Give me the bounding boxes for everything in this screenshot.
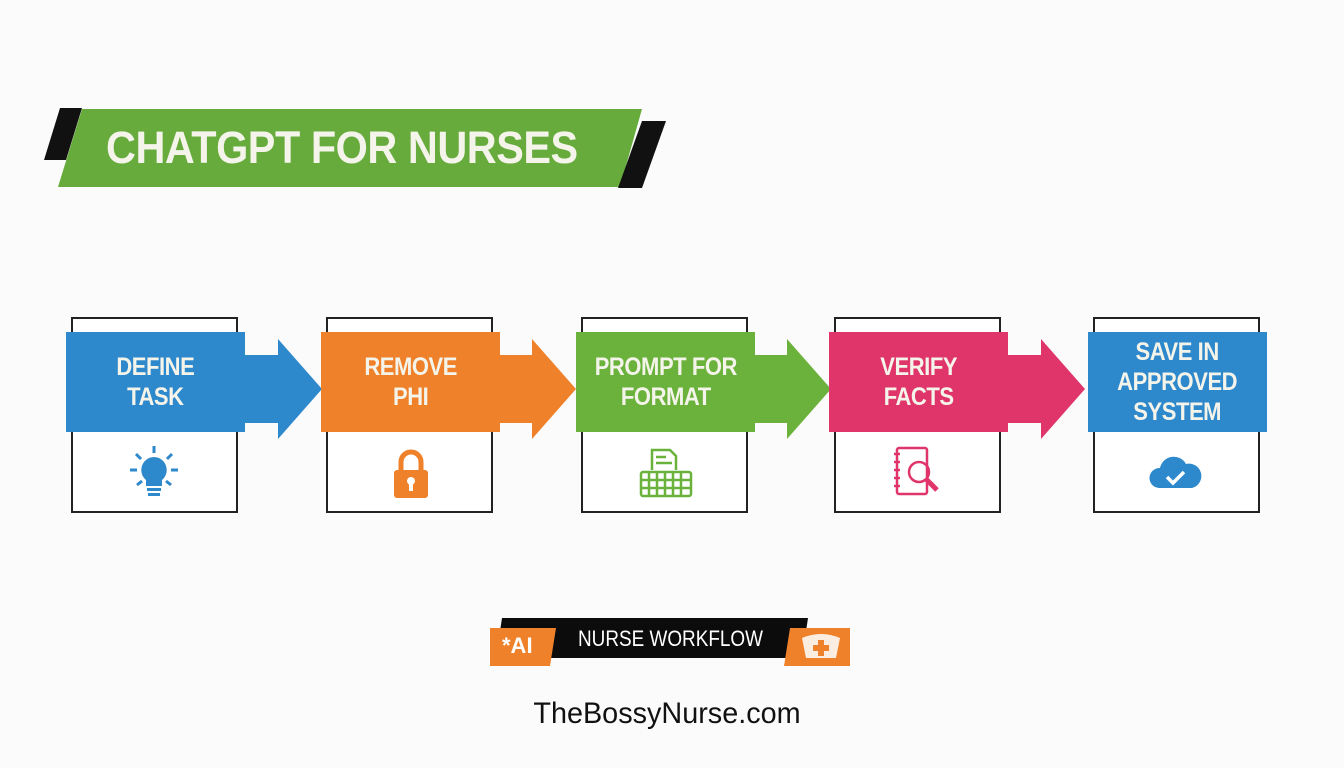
- step 5: save in approved system: SYSTEM: [1134, 398, 1221, 426]
- step 3: prompt for format: [576, 317, 829, 513]
- step 2: remove PHI: [321, 317, 576, 513]
- icon: lightbulb: [130, 446, 178, 496]
- step 2: remove PHI: PHI: [393, 383, 428, 411]
- step 4: verify facts: VERIFY: [880, 353, 957, 381]
- step 3: prompt for format: PROMPT FOR: [594, 353, 737, 381]
- step 2: remove PHI: REMOVE: [364, 353, 457, 381]
- AI label: *AI: [502, 633, 533, 658]
- website url: TheBossyNurse.com: [533, 697, 801, 730]
- title text: CHATGPT FOR NURSES: [106, 122, 578, 173]
- step 5: save in approved system: SAVE IN: [1136, 338, 1219, 366]
- icon: nurse cap: [802, 634, 840, 658]
- icon: padlock: [394, 450, 428, 498]
- step 4: verify facts: FACTS: [884, 383, 953, 411]
- step 1: define task: DEFINE: [116, 353, 195, 381]
- step 3: prompt for format: FORMAT: [621, 383, 710, 411]
- step 1: define task: [66, 317, 321, 513]
- icon: cloud check: [1150, 456, 1202, 488]
- footer banner: nurse workflow: [490, 618, 850, 666]
- step 4: verify facts: [829, 317, 1085, 513]
- step 5: save in approved system: APPROVED: [1118, 368, 1237, 396]
- icon: keyboard document: [640, 448, 692, 498]
- step 5: save in approved system: [1088, 317, 1267, 513]
- banner text: NURSE WORKFLOW: [578, 626, 763, 651]
- title banner: [44, 108, 666, 188]
- step 1: define task: TASK: [127, 383, 184, 411]
- icon: book with magnifier: [894, 446, 939, 496]
